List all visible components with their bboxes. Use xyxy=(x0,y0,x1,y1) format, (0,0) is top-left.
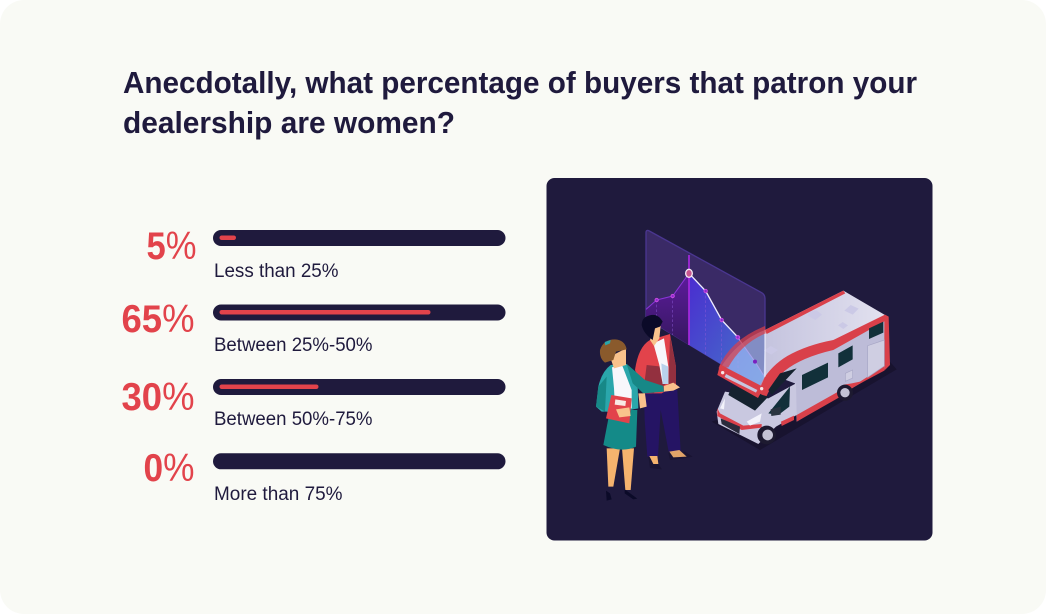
label: Between 25%-50% xyxy=(214,335,373,356)
value 0%: 0% xyxy=(144,447,194,490)
value 65%: 65% xyxy=(122,298,194,341)
row: less than 25% xyxy=(146,225,506,282)
camper van xyxy=(712,291,897,450)
women figures xyxy=(596,315,693,501)
label: More than 75% xyxy=(214,484,343,505)
progress bar 30% xyxy=(213,379,506,395)
row: more than 75% xyxy=(144,447,506,505)
row: between 50%-75% xyxy=(122,376,506,430)
label: Between 50%-75% xyxy=(214,409,373,430)
label: Less than 25% xyxy=(214,261,339,282)
back woman xyxy=(635,315,693,469)
holographic chart xyxy=(646,230,765,391)
progress bar 5% xyxy=(213,230,506,246)
progress bar 65% xyxy=(213,304,506,320)
front woman xyxy=(596,339,680,501)
title: dealership are women? xyxy=(123,105,455,140)
row: between 25%-50% xyxy=(122,298,506,356)
progress bar 0% xyxy=(213,453,506,469)
title: Anecdotally, what percentage of buyers that patron your xyxy=(123,65,917,100)
translucent windshield visor xyxy=(717,326,766,398)
value 5%: 5% xyxy=(146,225,196,268)
illustration panel xyxy=(546,178,932,540)
value 30%: 30% xyxy=(122,376,194,419)
title xyxy=(123,65,917,140)
